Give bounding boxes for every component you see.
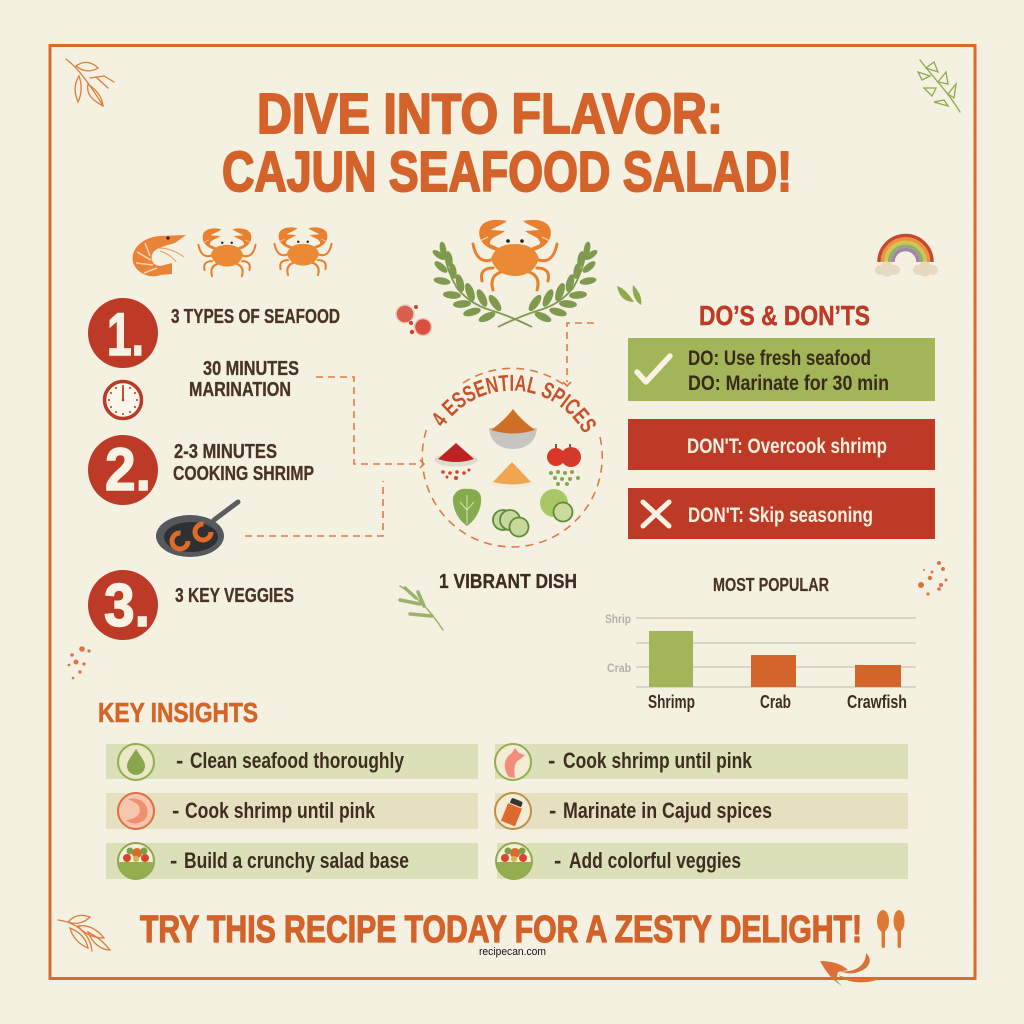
icon: splatter right: [918, 561, 948, 596]
icon: cabbage and cucumber: [540, 489, 572, 522]
bar chart: most popular: Shrip: [605, 612, 631, 626]
panel: do box: [628, 338, 935, 401]
icon: cucumber slices: [493, 510, 528, 536]
panel: don't skip: [628, 488, 935, 539]
step 1 badge: 1.: [107, 301, 144, 368]
icon: crab with laurel: [431, 220, 599, 327]
panel: essential spices circle: [421, 368, 604, 548]
icon: green herb top right: [918, 60, 960, 112]
panel: don't overcook: DON'T: Overcook shrimp: [687, 435, 887, 458]
icon: shrimp: [133, 235, 186, 276]
step 1 label: 3 TYPES OF SEAFOOD: [171, 306, 340, 328]
icon: orange herb top left: [66, 59, 114, 106]
title: [222, 82, 792, 204]
website credit: recipecan.com: [479, 946, 546, 958]
connector: cooking to spices: [245, 481, 383, 536]
icon: tomatoes and peas: [547, 444, 581, 486]
icon: spoons: [877, 910, 904, 948]
insight row: cook shrimp right: -: [548, 748, 555, 773]
icon: bowl of orange spice: [489, 409, 537, 449]
step 2 label: [173, 441, 314, 485]
step 2 label: COOKING SHRIMP: [173, 463, 314, 485]
insight row: colorful veggies: [496, 843, 908, 879]
insight row: clean seafood: [106, 744, 478, 780]
icon: frying pan with shrimp: [156, 502, 238, 557]
one vibrant dish label: 1 VIBRANT DISH: [439, 571, 577, 593]
panel: don't skip: DON'T: Skip seasoning: [688, 504, 873, 527]
icon: small green leaves: [617, 285, 641, 305]
icon: green herb sprig: [400, 586, 443, 630]
insight row: colorful veggies: Add colorful veggies: [569, 848, 741, 873]
icon: red spice pieces: [396, 305, 432, 336]
heading: do's and don'ts: DO’S & DON’TS: [699, 300, 870, 331]
bar chart: most popular: Crawfish: [847, 692, 907, 712]
icon: splatter left: [68, 646, 91, 679]
step 2 badge: [88, 435, 158, 505]
insight row: salad base: -: [170, 848, 177, 873]
title: CAJUN SEAFOOD SALAD!: [222, 140, 792, 204]
panel: do box: DO: Use fresh seafood: [688, 347, 871, 370]
connector: do's and don'ts to spices: [563, 323, 594, 386]
insight row: colorful veggies: -: [554, 848, 561, 873]
insight row: marinate: Marinate in Cajud spices: [563, 798, 772, 823]
icon: check mark: [637, 356, 670, 382]
step 1 badge: [88, 298, 158, 368]
curved heading: 4 essential spices: 4 ESSENTIAL SPICES: [433, 374, 596, 432]
marination label: 30 MINUTES: [203, 358, 299, 380]
connector: marination to spices: [316, 377, 424, 468]
bar chart: most popular: Shrimp: [648, 692, 695, 712]
icon: rainbow with clouds: [875, 236, 938, 276]
insight row: cook shrimp left: Cook shrimp until pink: [185, 798, 376, 823]
icon: small crab one: [198, 228, 256, 276]
icon: golden spice mound: [490, 462, 534, 488]
insight row: clean seafood: -: [176, 748, 183, 773]
insight row: cook shrimp right: Cook shrimp until pink: [563, 748, 753, 773]
step 2 label: 2-3 MINUTES: [174, 441, 277, 463]
insight row: marinate: [495, 793, 908, 829]
step 2 badge: 2.: [105, 436, 151, 503]
insight row: marinate: -: [549, 798, 556, 823]
step 3 label: 3 KEY VEGGIES: [175, 585, 294, 607]
chart title: MOST POPULAR: [713, 575, 829, 595]
icon: orange herb bottom left: [58, 915, 110, 951]
step 3 badge: [88, 570, 158, 640]
insight row: salad base: [106, 843, 478, 879]
icon: lettuce: [453, 489, 481, 526]
marination label: MARINATION: [189, 379, 291, 401]
icon: swoosh arrow: [820, 953, 880, 986]
bar chart: most popular: [605, 575, 916, 712]
insight row: clean seafood: Clean seafood thoroughly: [190, 748, 405, 773]
insight row: cook shrimp left: -: [172, 798, 179, 823]
icon: clock: [104, 382, 142, 418]
icon: cross mark: [643, 502, 669, 526]
bar chart: most popular: Crab: [607, 661, 631, 675]
marination label: [189, 358, 299, 401]
insight row: cook shrimp left: [106, 793, 478, 829]
title: DIVE INTO FLAVOR:: [257, 82, 723, 146]
call to action: TRY THIS RECIPE TODAY FOR A ZESTY DELIGHT!: [140, 909, 862, 951]
step 3 badge: 3.: [104, 572, 150, 639]
bar chart: most popular: Crab: [760, 692, 791, 712]
icon: red spice plate: [434, 443, 478, 480]
panel: do box: DO: Marinate for 30 min: [688, 372, 889, 395]
insight row: salad base: Build a crunchy salad base: [184, 848, 409, 873]
insight row: cook shrimp right: [495, 744, 908, 780]
heading: key insights: KEY INSIGHTS: [98, 697, 258, 728]
icon: small crab two: [274, 227, 332, 275]
panel: don't overcook: [628, 419, 935, 470]
